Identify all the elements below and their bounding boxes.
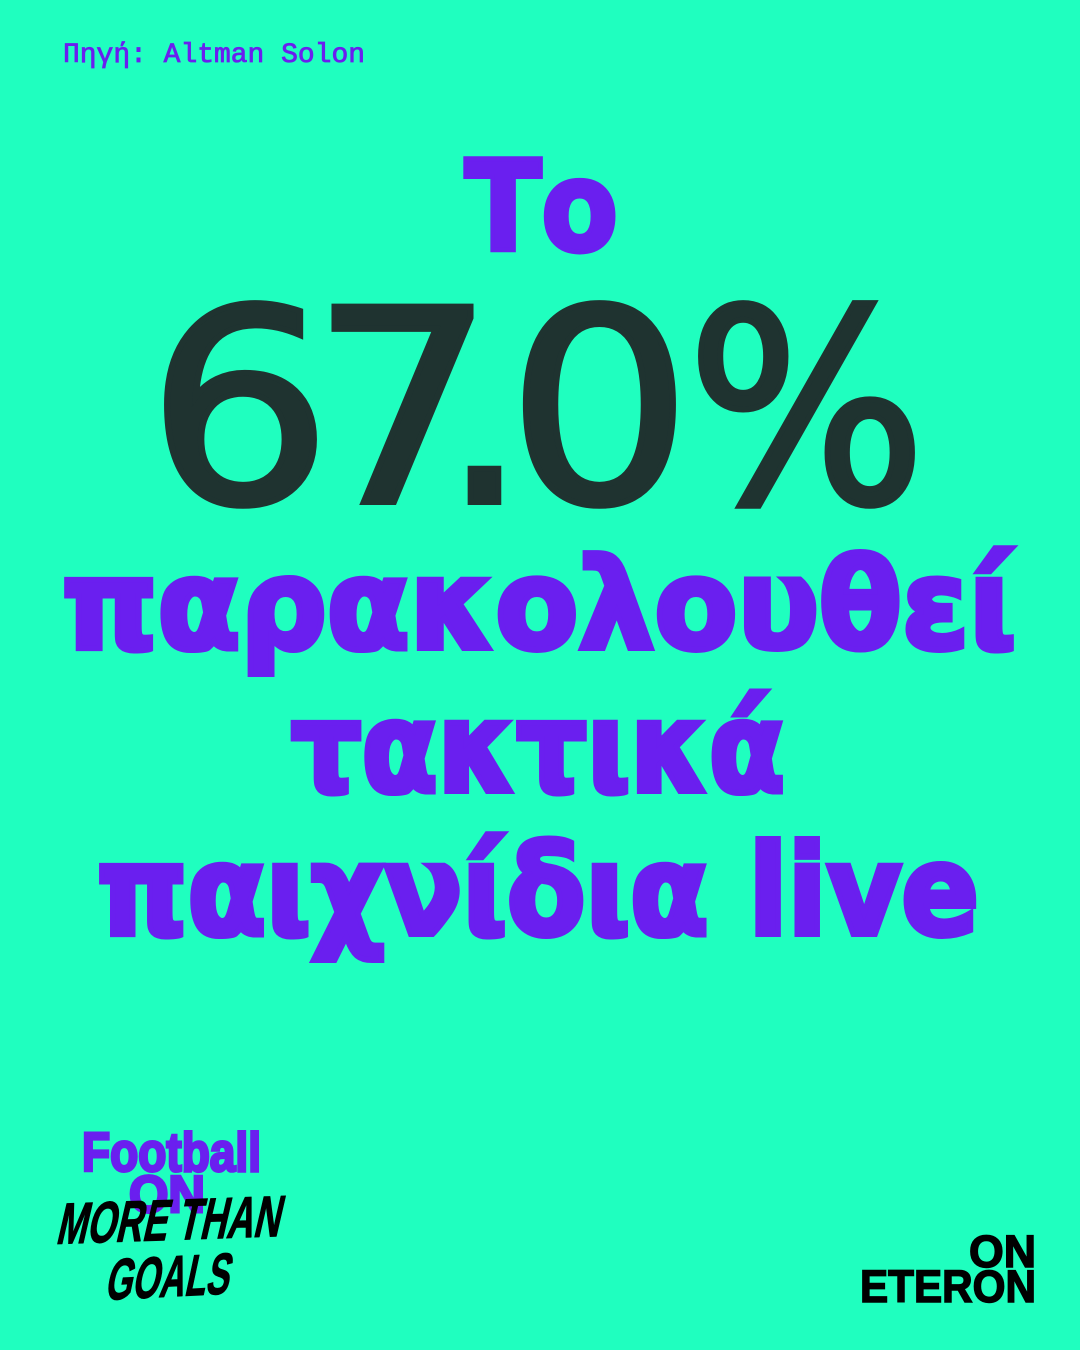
headline statistic bbox=[62, 135, 1016, 964]
big number: 67.0%: 0 bbox=[507, 254, 692, 566]
logo: ON ETERON bbox=[860, 1226, 1036, 1312]
logo wordmark: ON: ON bbox=[129, 1166, 205, 1224]
logo wordmark: ON: ON bbox=[969, 1226, 1036, 1277]
big number: 67.0%: 6 bbox=[147, 254, 332, 566]
script tagline: goals: GOALS bbox=[101, 1241, 239, 1313]
logo wordmark: ETERON: ETERON bbox=[860, 1261, 1036, 1312]
logo wordmark: Football: Football bbox=[82, 1121, 261, 1183]
logo: Football ON More Than Goals bbox=[52, 1121, 291, 1313]
heading: line 2: τακτικά bbox=[291, 676, 785, 821]
heading: line 1: παρακολουθεί bbox=[62, 533, 1016, 678]
big number: 67.0%: . bbox=[442, 254, 527, 566]
script tagline: more than: MORE THAN bbox=[52, 1184, 291, 1257]
source credit: Πηγή: Altman Solon bbox=[63, 40, 365, 71]
big number: 67.0% bbox=[147, 254, 926, 566]
big number: 67.0%: % bbox=[687, 254, 926, 566]
heading: line 3: παιχνίδια live bbox=[97, 819, 979, 964]
heading: intro word: Το bbox=[465, 135, 618, 280]
big number: 67.0%: 7 bbox=[311, 254, 495, 566]
